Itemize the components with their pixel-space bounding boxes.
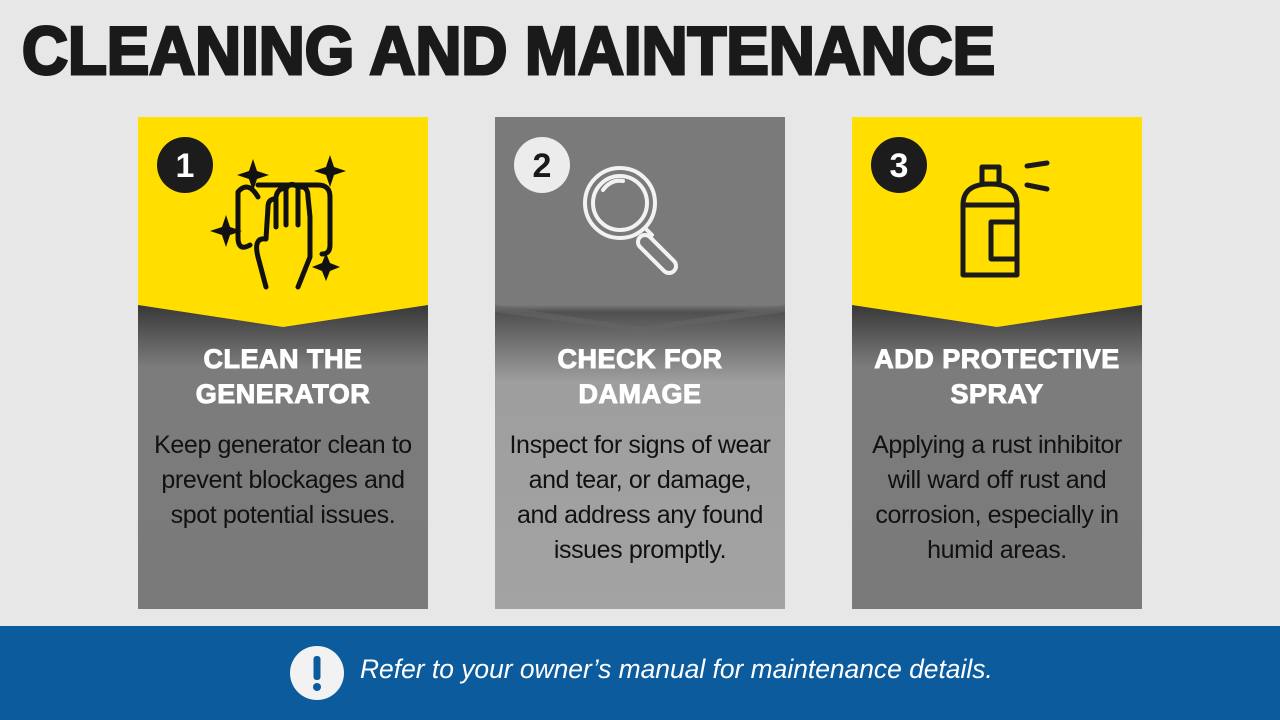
heading: DAMAGE bbox=[578, 379, 702, 409]
panel: check for damage bbox=[495, 117, 785, 609]
description: Inspect for signs of wear bbox=[510, 431, 770, 459]
title: CLEANING AND MAINTENANCE bbox=[22, 13, 995, 89]
description: will ward off rust and bbox=[888, 466, 1106, 494]
yellow header with icon bbox=[852, 117, 1142, 327]
description bbox=[154, 431, 412, 529]
description bbox=[510, 431, 770, 564]
description: Applying a rust inhibitor bbox=[872, 431, 1122, 459]
heading bbox=[874, 344, 1120, 409]
description: prevent blockages and bbox=[161, 466, 405, 494]
header with icon bbox=[495, 137, 785, 319]
heading bbox=[196, 344, 370, 409]
footer text: Refer to your owner’s manual for maintenance details. bbox=[360, 654, 993, 684]
description: Keep generator clean to bbox=[154, 431, 412, 459]
panel: add protective spray bbox=[852, 117, 1142, 609]
heading: CLEAN THE bbox=[204, 344, 362, 374]
heading: GENERATOR bbox=[196, 379, 370, 409]
heading bbox=[558, 344, 722, 409]
description bbox=[872, 431, 1122, 564]
yellow header with icon: 3 bbox=[890, 147, 908, 185]
heading: SPRAY bbox=[950, 379, 1044, 409]
description: humid areas. bbox=[927, 536, 1067, 564]
icon: exclamation bbox=[290, 646, 344, 700]
yellow header with icon bbox=[138, 117, 428, 327]
panel: clean the generator bbox=[138, 117, 428, 609]
footer banner bbox=[0, 626, 1280, 720]
heading: CHECK FOR bbox=[558, 344, 722, 374]
description: and tear, or damage, bbox=[529, 466, 751, 494]
description: spot potential issues. bbox=[171, 501, 395, 529]
description: issues promptly. bbox=[554, 536, 726, 564]
description: and address any found bbox=[517, 501, 763, 529]
description: corrosion, especially in bbox=[875, 501, 1119, 529]
yellow header with icon: 1 bbox=[176, 147, 194, 185]
heading: ADD PROTECTIVE bbox=[874, 344, 1120, 374]
header with icon: 2 bbox=[533, 147, 551, 185]
